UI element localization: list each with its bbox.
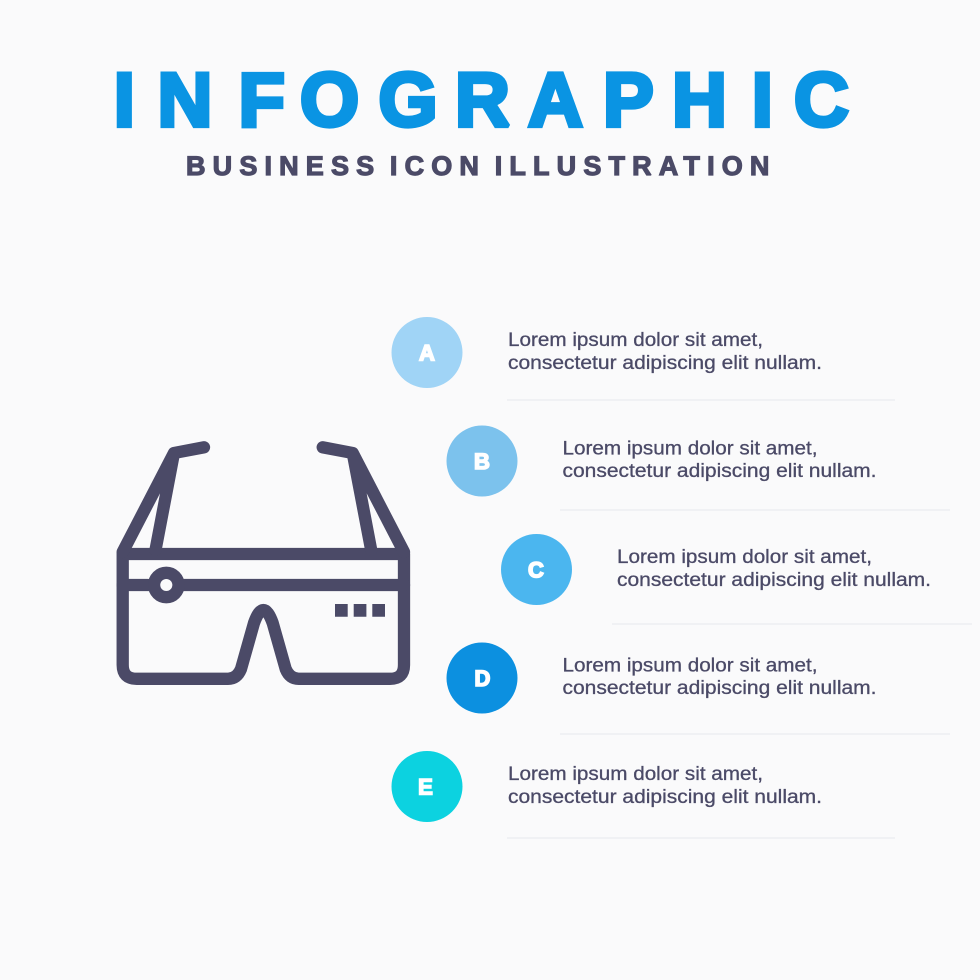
text C: Lorem ipsum dolor sit amet, [617,547,872,568]
badge B: B [474,449,490,474]
text E [508,764,822,808]
badge D [446,642,518,714]
text C [617,547,931,591]
text D: Lorem ipsum dolor sit amet, [562,656,818,676]
text A [508,330,822,374]
title: INFOGRAPHIC [114,58,849,143]
text E: consectetur adipiscing elit nullam. [508,787,822,808]
badge E: E [418,774,433,800]
subtitle: BUSINESS ICON ILLUSTRATION [186,151,773,181]
text D [562,656,876,699]
badge E [392,751,462,822]
text B: consectetur adipiscing elit nullam. [562,461,876,482]
text D: consectetur adipiscing elit nullam. [562,678,876,699]
item C [501,534,972,624]
text A: Lorem ipsum dolor sit amet, [508,330,763,351]
icon: smart glasses [123,447,404,679]
text B: Lorem ipsum dolor sit amet, [562,438,818,460]
badge D: D [475,666,490,691]
badge B [446,426,518,496]
item E [392,751,895,838]
item B [446,426,950,510]
badge A [392,317,462,388]
text E: Lorem ipsum dolor sit amet, [508,764,763,785]
badge A: A [419,340,435,366]
item D [446,642,950,734]
item A [392,317,895,400]
badge C [501,534,572,605]
text A: consectetur adipiscing elit nullam. [508,353,822,374]
text B [562,438,876,482]
badge C: C [528,558,544,582]
text C: consectetur adipiscing elit nullam. [617,570,931,591]
